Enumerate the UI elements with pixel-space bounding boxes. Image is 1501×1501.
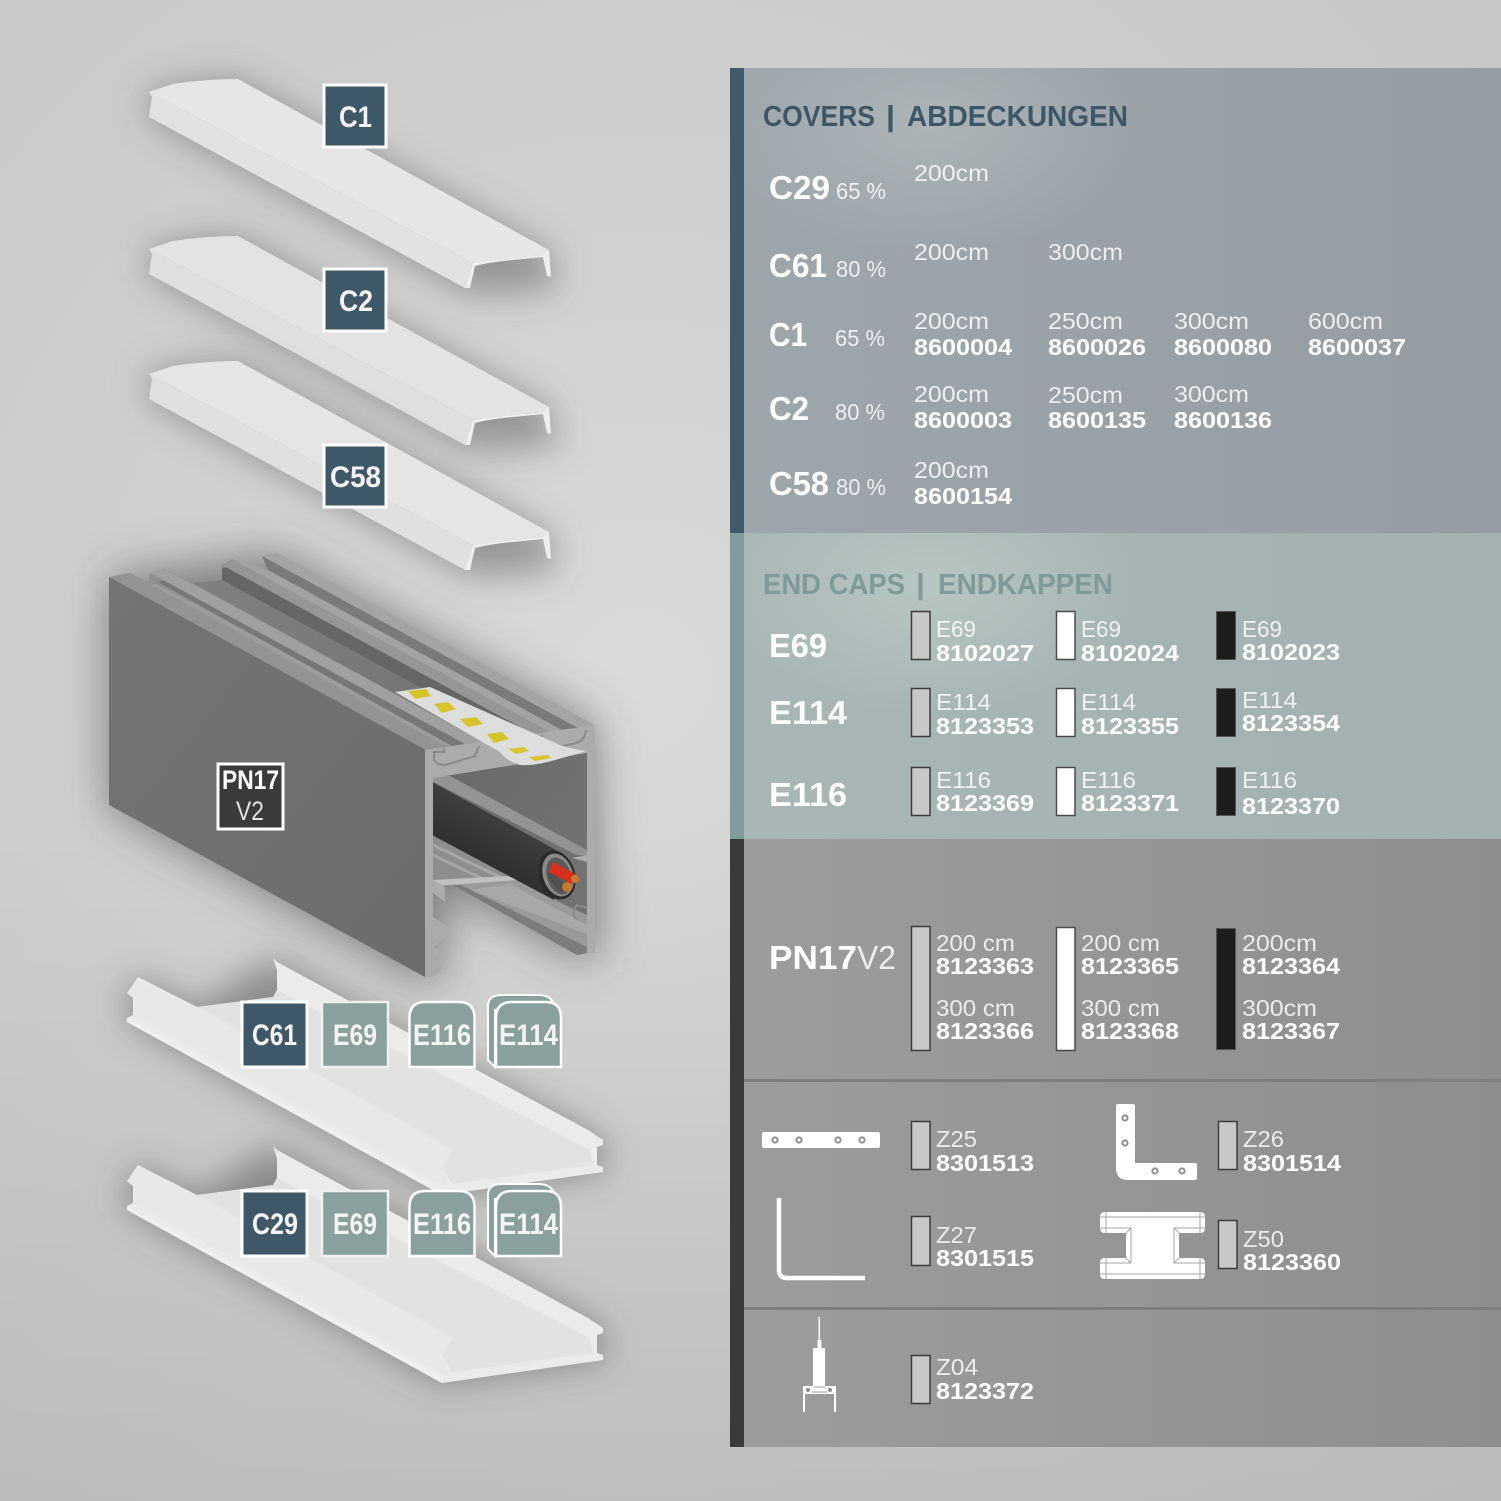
row: C2: 250cm [1048, 382, 1123, 408]
icon: H connector Z50 [1100, 1212, 1205, 1279]
row: E116: 8123370 [1242, 793, 1340, 819]
label group: C29 row [242, 1184, 561, 1256]
product: PN17 V2 profile [109, 553, 600, 982]
label: E116: E116 [413, 1019, 471, 1052]
row: E116: 8123371 [1081, 790, 1179, 816]
label: PN17 V2 [218, 764, 283, 829]
row: E116: E116 [1081, 767, 1136, 793]
label: E116 [410, 1191, 474, 1256]
row: C2: 80 % [835, 399, 885, 425]
heading: end caps: END CAPS [763, 569, 905, 601]
item: Z50 [1218, 1220, 1341, 1275]
label: C2: C2 [339, 285, 373, 318]
row: PN17 V2: 8123367 [1242, 1018, 1340, 1044]
row: E116: 8123369 [936, 790, 1034, 816]
row: C2: C2 [769, 390, 809, 427]
row: C1: 65 % [835, 325, 885, 351]
label: E114: E114 [499, 1019, 558, 1052]
heading: covers: | [886, 101, 895, 133]
label: E114 [488, 1184, 561, 1256]
profile side face [109, 577, 425, 977]
row: E69: 8102023 [1242, 639, 1340, 665]
icon: ceiling suspension Z04 [803, 1317, 836, 1412]
row: E114: 8123353 [936, 713, 1034, 739]
row: C2: 300cm [1174, 381, 1249, 407]
panel: end caps [730, 533, 1501, 839]
label: E69: E69 [333, 1208, 377, 1241]
row: C61: C61 [769, 247, 827, 284]
row: E116: E116 [936, 767, 991, 793]
row: C58: 80 % [836, 474, 886, 500]
item: Z26 [1218, 1122, 1341, 1176]
item: Z25: 8301513 [936, 1150, 1034, 1176]
row: E69: E69 [1081, 616, 1121, 642]
row: PN17 V2: 8123366 [936, 1018, 1034, 1044]
label: E69: E69 [333, 1019, 377, 1052]
row: C58: 8600154 [914, 483, 1012, 509]
row: C61: 80 % [836, 256, 886, 282]
row: C58 [769, 457, 1012, 509]
profile front hooks [434, 730, 587, 920]
row: E116 [769, 767, 1340, 819]
label: PN17 V2: PN17 [222, 765, 279, 795]
item: Z27: Z27 [936, 1222, 977, 1248]
row: C1: 250cm [1048, 308, 1123, 334]
label: C2 [324, 269, 386, 331]
heading: covers: ABDECKUNGEN [907, 101, 1128, 133]
label: E114: E114 [499, 1208, 558, 1241]
row: C61: 300cm [1048, 239, 1123, 265]
item: Z25: Z25 [936, 1126, 977, 1152]
row: PN17 V2: 300 cm [936, 995, 1015, 1021]
row: C1: 8600004 [914, 334, 1012, 360]
row: PN17 V2: 8123364 [1242, 953, 1340, 979]
row: E116: E116 [769, 776, 847, 813]
row: C29: 65 % [836, 178, 886, 204]
row: E69 [769, 612, 1340, 666]
icon: straight connector Z25 [762, 1132, 880, 1148]
row: C29: C29 [769, 169, 830, 206]
row: E114 [769, 687, 1340, 739]
label: E116 [410, 1002, 474, 1067]
label: C29 [242, 1191, 307, 1256]
label: C58 [324, 445, 386, 507]
row: E69: E69 [1242, 616, 1282, 642]
row: C2: 8600135 [1048, 407, 1146, 433]
product: channel cover C61 [127, 958, 606, 1195]
row: C1: 200cm [914, 308, 989, 334]
product: cover C58 [149, 361, 556, 577]
row: C2 [769, 381, 1272, 433]
item: Z04: 8123372 [936, 1378, 1034, 1404]
panel: profile and accessories [730, 839, 1501, 1447]
item: Z27: 8301515 [936, 1245, 1034, 1271]
row: E114: 8123355 [1081, 713, 1179, 739]
heading: end caps [763, 569, 1113, 601]
label: PN17 V2: V2 [236, 796, 264, 826]
row: E114: E114 [1242, 687, 1297, 713]
row: C2: 8600136 [1174, 407, 1272, 433]
row: C29 [769, 160, 989, 206]
row: E114: E114 [936, 689, 991, 715]
row: PN17 V2: 8123368 [1081, 1018, 1179, 1044]
label: C58: C58 [330, 461, 381, 494]
row: PN17 V2 [769, 926, 1340, 1050]
row: E114: E114 [769, 694, 848, 731]
row: C1: 300cm [1174, 308, 1249, 334]
item: Z50: Z50 [1243, 1226, 1284, 1252]
row: E69: 8102024 [1081, 640, 1179, 666]
label: C61: C61 [252, 1019, 297, 1052]
product: channel cover C29 [127, 1146, 606, 1383]
product: cover C1 [149, 79, 556, 295]
cable [432, 782, 582, 904]
row: C61 [769, 239, 1123, 284]
row: C1 [769, 308, 1406, 360]
row: PN17 V2: 8123363 [936, 953, 1034, 979]
label: E69 [322, 1002, 388, 1067]
item: Z04 [912, 1354, 1034, 1404]
row: E69: E69 [936, 616, 976, 642]
row: C1: 8600026 [1048, 334, 1146, 360]
heading: end caps: | [916, 569, 925, 601]
row: PN17 V2: 300cm [1242, 995, 1317, 1021]
row: PN17 V2: 200 cm [1081, 930, 1160, 956]
profile inner cavity [433, 753, 587, 915]
item: Z26: 8301514 [1243, 1150, 1341, 1176]
item: Z26: Z26 [1243, 1126, 1284, 1152]
row: PN17 V2: 200cm [1242, 930, 1317, 956]
row: C61: 200cm [914, 239, 989, 265]
row: C1: 600cm [1308, 308, 1383, 334]
icon: corner bracket Z27 [779, 1198, 865, 1278]
heading: covers [763, 101, 1128, 133]
row: C1: 8600080 [1174, 334, 1272, 360]
panel: covers [730, 68, 1501, 533]
row: E69: 8102027 [936, 640, 1034, 666]
row: E69: E69 [769, 627, 827, 664]
label: C29: C29 [252, 1208, 298, 1241]
row: C58: C58 [769, 465, 829, 502]
label: C61 [242, 1002, 307, 1067]
item: Z04: Z04 [936, 1354, 978, 1380]
row: C58: 200cm [914, 457, 989, 483]
row: E114: E114 [1081, 689, 1136, 715]
row: E114: 8123354 [1242, 710, 1340, 736]
row: C1: 8600037 [1308, 334, 1406, 360]
row: C29: 200cm [914, 160, 989, 186]
LED strip [395, 687, 587, 765]
profile front frame [425, 725, 595, 977]
profile upper inner rail [433, 776, 587, 856]
icon: L plate Z26 [1116, 1104, 1197, 1180]
row: C2: 8600003 [914, 407, 1012, 433]
item: Z25 [912, 1122, 1034, 1176]
label: C1: C1 [339, 101, 372, 134]
row: C2: 200cm [914, 381, 989, 407]
row: PN17 V2: V2 [857, 939, 896, 976]
product: cover C2 [149, 236, 556, 452]
row: PN17 V2: 300 cm [1081, 995, 1160, 1021]
label: E114 [488, 995, 561, 1067]
row: PN17 V2: 8123365 [1081, 953, 1179, 979]
item: Z27 [912, 1216, 1034, 1271]
row: E116: E116 [1242, 767, 1297, 793]
label: C1 [324, 85, 386, 147]
profile top rails [109, 553, 594, 750]
item: Z50: 8123360 [1243, 1249, 1341, 1275]
row: PN17 V2: 200 cm [936, 930, 1015, 956]
label: E69 [322, 1191, 388, 1256]
label: E116: E116 [413, 1208, 471, 1241]
row: C1: C1 [769, 316, 807, 353]
heading: end caps: ENDKAPPEN [938, 569, 1113, 601]
label group: C61 row [242, 995, 561, 1067]
row: PN17 V2: PN17 [769, 939, 857, 976]
profile lower rails [433, 835, 587, 955]
heading: covers: COVERS [763, 101, 875, 133]
